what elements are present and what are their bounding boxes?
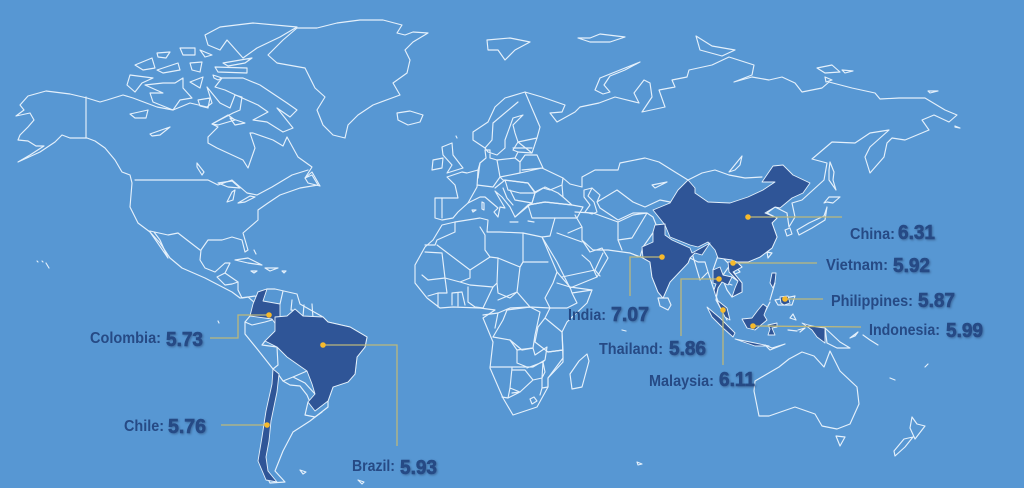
label: Philippines: bbox=[831, 293, 913, 310]
leader line bbox=[221, 424, 267, 426]
Madagascar bbox=[570, 354, 589, 389]
landmass: North America bbox=[16, 20, 428, 303]
leader line bbox=[323, 345, 397, 446]
label: Colombia: bbox=[90, 330, 161, 347]
value: 5.93 bbox=[400, 457, 437, 479]
Greenland bbox=[268, 20, 428, 138]
value: 5.76 bbox=[168, 416, 206, 438]
leader line bbox=[210, 315, 269, 338]
leader line bbox=[733, 262, 817, 264]
callout: Thailand bbox=[599, 276, 722, 360]
marker bbox=[745, 214, 751, 220]
label: Chile: bbox=[124, 418, 164, 435]
Papua New Guinea bbox=[825, 328, 850, 348]
marker bbox=[716, 276, 722, 282]
callout: China bbox=[745, 214, 935, 244]
value: 5.86 bbox=[669, 338, 706, 360]
highlighted country: China bbox=[653, 165, 810, 262]
marker bbox=[750, 323, 756, 329]
value: 5.92 bbox=[893, 255, 930, 277]
value: 5.73 bbox=[166, 329, 203, 351]
Arctic islands bbox=[205, 23, 297, 58]
marker bbox=[659, 254, 665, 260]
marker bbox=[264, 422, 270, 428]
marker bbox=[720, 307, 726, 313]
Black Sea and Caspian bbox=[528, 187, 597, 214]
Indonesia minor islands bbox=[765, 283, 805, 350]
value: 6.31 bbox=[898, 222, 935, 244]
callout: Brazil bbox=[320, 342, 437, 479]
highlighted country: Vietnam bbox=[728, 262, 742, 297]
highlighted country: Malaysia bbox=[717, 300, 730, 320]
Taiwan and Hainan bbox=[733, 252, 772, 274]
leader line bbox=[748, 216, 842, 218]
label: China: bbox=[850, 226, 895, 243]
highlighted country: Thailand bbox=[713, 267, 732, 297]
marker bbox=[320, 342, 326, 348]
landmass: Eurasia bbox=[432, 34, 960, 331]
Hawaii bbox=[37, 261, 49, 268]
value: 5.99 bbox=[946, 320, 983, 342]
leader line bbox=[630, 257, 662, 296]
Iceland bbox=[397, 111, 423, 125]
callout: Vietnam bbox=[730, 255, 930, 277]
leader line bbox=[722, 310, 724, 365]
marker bbox=[782, 296, 788, 302]
highlighted country: Brazil bbox=[265, 309, 367, 411]
highlighted country: India bbox=[642, 224, 710, 298]
landmass: South America bbox=[218, 289, 367, 484]
label: Brazil: bbox=[352, 458, 395, 475]
leader line bbox=[753, 326, 861, 327]
Newfoundland and Caribbean bbox=[235, 172, 320, 273]
callout: India bbox=[568, 254, 665, 326]
value: 7.07 bbox=[611, 304, 649, 326]
label: Thailand: bbox=[599, 341, 663, 358]
label: India: bbox=[568, 307, 606, 324]
value: 6.11 bbox=[719, 369, 755, 391]
leader line bbox=[681, 279, 719, 336]
callout: Philippines bbox=[782, 290, 955, 312]
label: Malaysia: bbox=[649, 373, 714, 390]
Islands: Britain, Ireland, Arctic, Japan, Sakhalin bbox=[432, 38, 530, 173]
label: Indonesia: bbox=[869, 322, 940, 339]
highlighted country: Philippines bbox=[770, 273, 790, 305]
value: 5.87 bbox=[918, 290, 955, 312]
leader line bbox=[785, 298, 823, 300]
callout: Colombia bbox=[90, 312, 272, 351]
marker bbox=[266, 312, 272, 318]
callout: Chile bbox=[124, 416, 270, 438]
callout: Indonesia bbox=[750, 320, 983, 342]
label: Vietnam: bbox=[826, 257, 888, 274]
highlighted country: Chile bbox=[258, 369, 279, 482]
landmass: Africa bbox=[415, 218, 592, 415]
highlighted country: Colombia bbox=[250, 289, 280, 326]
landmass: Australasia bbox=[637, 252, 928, 465]
marker bbox=[730, 260, 736, 266]
callout: Malaysia bbox=[649, 307, 755, 391]
highlighted country: Indonesia bbox=[707, 304, 825, 346]
